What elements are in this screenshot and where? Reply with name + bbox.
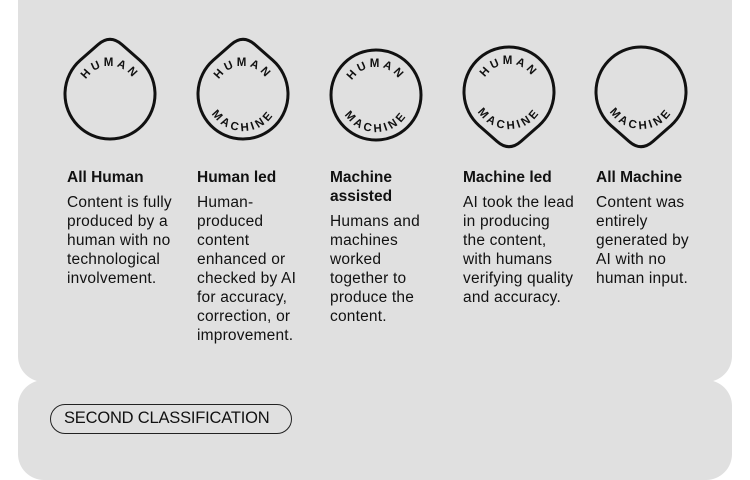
text: human led: enhanced or: [197, 251, 285, 268]
text: human led: for accuracy,: [197, 289, 287, 306]
icon: human led: MACHINE: [212, 109, 272, 132]
text: machine assisted: Machine: [330, 169, 392, 186]
text: machine led: and accuracy.: [463, 289, 561, 306]
text: human led: improvement.: [197, 327, 293, 344]
panel: first classification: [18, 0, 732, 382]
text: machine assisted: Humans and: [330, 213, 420, 230]
icon: machine assisted: [330, 48, 422, 142]
text: all human: [67, 169, 172, 287]
icon: machine assisted: MACHINE: [344, 110, 406, 132]
icon: all human: [64, 38, 156, 140]
text: machine led: with humans: [463, 251, 552, 268]
text: all machine: AI with no: [596, 251, 666, 268]
icon: all human: HUMAN: [80, 58, 138, 79]
text: machine led: [463, 169, 574, 306]
text: all machine: human input.: [596, 270, 688, 287]
text: all human: Content is fully: [67, 194, 172, 211]
text: human led: correction, or: [197, 308, 290, 325]
text: all human: involvement.: [67, 270, 156, 287]
text: all human: technological: [67, 251, 160, 268]
text: machine led: verifying quality: [463, 270, 573, 287]
text: all machine: [596, 169, 689, 287]
text: all machine: Content was: [596, 194, 684, 211]
text: human led: content: [197, 232, 249, 249]
text: machine assisted: produce the: [330, 289, 414, 306]
icon: human led: [196, 38, 290, 140]
text: machine led: in producing: [463, 213, 550, 230]
text: human led: Human-: [197, 194, 253, 211]
text: all machine: entirely: [596, 213, 648, 230]
text: machine led: the content,: [463, 232, 546, 249]
text: all machine: All Machine: [596, 169, 682, 186]
text: all machine: generated by: [596, 232, 689, 249]
icons row: [64, 38, 688, 148]
text: human led: Human led: [197, 169, 276, 186]
text: machine assisted: machines: [330, 232, 398, 249]
text: human led: [197, 169, 296, 344]
text: all human: produced by a: [67, 213, 168, 230]
text: machine assisted: assisted: [330, 188, 392, 205]
text: human led: checked by AI: [197, 270, 296, 287]
icon: all machine: [594, 46, 688, 148]
text: machine led: AI took the lead: [463, 194, 574, 211]
label pill: second classification: [50, 404, 292, 434]
icon: machine led: [462, 46, 556, 148]
panel: second classification: [18, 380, 732, 480]
label pill: second classification: SECOND CLASSIFICATION: [64, 409, 269, 427]
text: machine assisted: worked: [330, 251, 381, 268]
icon: machine led: MACHINE: [478, 107, 538, 130]
text: machine assisted: together to: [330, 270, 406, 287]
text: machine led: Machine led: [463, 169, 552, 186]
icon: machine assisted: HUMAN: [346, 58, 404, 80]
text: machine assisted: content.: [330, 308, 387, 325]
icon: human led: HUMAN: [213, 58, 271, 79]
text: all human: All Human: [67, 169, 144, 186]
icon: all machine: MACHINE: [610, 107, 670, 130]
text: human led: produced: [197, 213, 263, 230]
icon: machine led: HUMAN: [479, 56, 537, 77]
text: machine assisted: [330, 169, 420, 325]
text: all human: human with no: [67, 232, 170, 249]
